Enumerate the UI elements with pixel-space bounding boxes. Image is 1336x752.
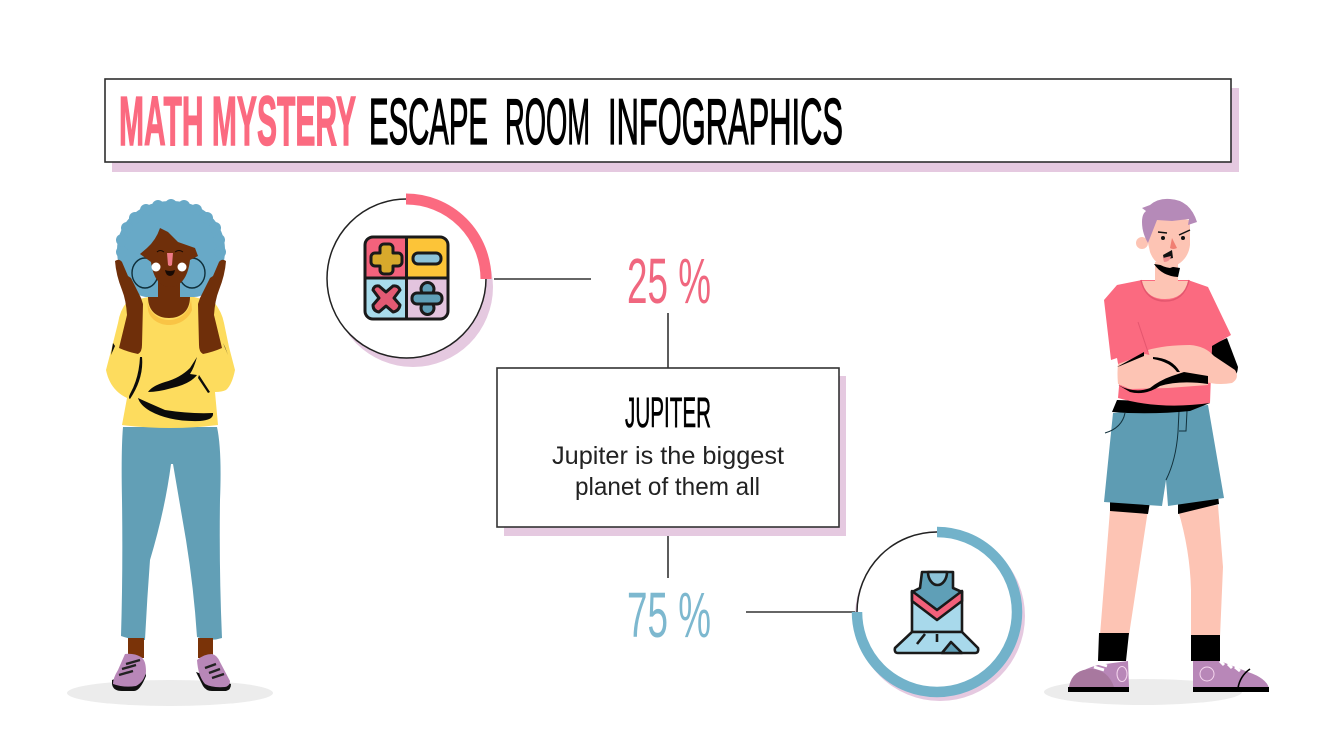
crossed arms	[1118, 354, 1208, 389]
info box: Jupiter: planet of them all	[575, 473, 760, 501]
info box: Jupiter: JUPITER	[625, 389, 711, 437]
25 percent label: 25 %	[627, 245, 711, 317]
icon: dress	[895, 572, 978, 653]
title: black part: ROOM	[505, 86, 590, 158]
character: woman with blue hair	[67, 199, 273, 706]
shoes	[1069, 661, 1129, 687]
neck	[1142, 262, 1188, 299]
neck and chest	[148, 280, 190, 318]
body text: Jupiter is the biggest	[552, 442, 784, 470]
75 percent donut	[855, 531, 1025, 701]
title banner: MATH MYSTERY	[119, 82, 356, 160]
icon: math symbols	[365, 237, 448, 319]
ground shadow	[1044, 679, 1242, 705]
black waist band	[1112, 400, 1210, 413]
hair	[1142, 199, 1197, 243]
connector lines	[494, 279, 857, 612]
hair	[116, 199, 226, 297]
shorts	[1104, 405, 1224, 506]
shirt	[1104, 280, 1231, 406]
info box: Jupiter	[497, 368, 846, 536]
sweater	[106, 297, 235, 428]
socks	[1098, 633, 1220, 661]
75 percent label: 75 %	[627, 579, 711, 651]
legs	[1100, 505, 1223, 637]
short leg bands	[1110, 495, 1219, 514]
title banner	[105, 79, 1239, 172]
title: black part	[369, 86, 843, 158]
25 percent donut	[327, 199, 493, 367]
ground shadow	[67, 680, 273, 706]
title banner: INFOGRAPHICS	[608, 86, 843, 158]
sweater creases	[111, 343, 228, 421]
shoes	[112, 668, 146, 691]
title: black part: ESCAPE	[369, 86, 488, 158]
jeans	[121, 427, 222, 640]
earrings	[132, 258, 158, 288]
facial features	[1158, 230, 1190, 235]
character: man with purple hair	[1044, 199, 1269, 705]
hands and forearms	[115, 260, 143, 354]
head	[1136, 237, 1148, 249]
ankles	[128, 638, 213, 658]
right sleeve	[1210, 338, 1238, 383]
face	[140, 228, 198, 287]
